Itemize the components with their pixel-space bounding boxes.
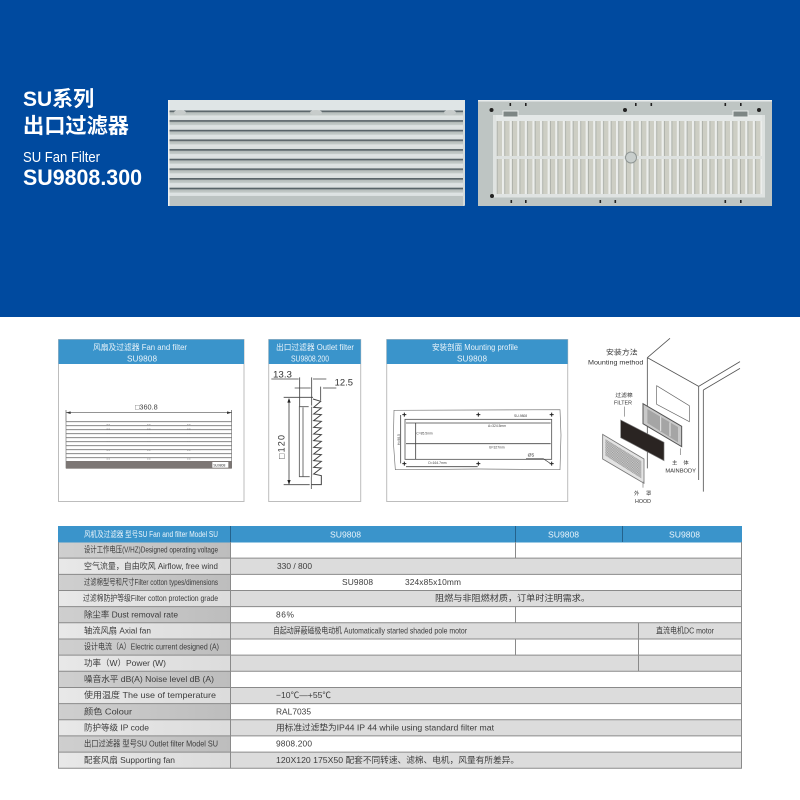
diagram: mounting method bbox=[588, 338, 740, 505]
panel: mounting profile bbox=[387, 340, 568, 502]
title: product name: 出口过滤器 bbox=[23, 115, 129, 138]
table values: 9808.200 bbox=[276, 738, 312, 748]
drawing: outlet filter section: □120 bbox=[277, 435, 287, 459]
heading: mounting method: 安装方法 bbox=[606, 347, 638, 356]
table row labels: 过滤棉型号和尺寸Filter cotton types/dimensions bbox=[84, 577, 218, 587]
table row labels bbox=[83, 544, 219, 765]
panel header: mounting profile bbox=[387, 340, 568, 364]
table row labels: 配套风扇 Supporting fan bbox=[84, 755, 175, 765]
table values bbox=[273, 561, 714, 765]
table row labels: 除尘率 Dust removal rate bbox=[84, 610, 178, 620]
panel header: outlet filter bbox=[269, 340, 361, 364]
table values: 用标准过滤垫为IP44 IP 44 while using standard filter mat bbox=[276, 722, 495, 732]
table header row: 风机及过滤器 型号SU Fan and filter Model SU bbox=[84, 529, 218, 539]
filter mat bbox=[621, 420, 664, 461]
drawing: mounting cut-out: H=98.5 bbox=[397, 434, 401, 445]
drawing: outlet filter section: 12.5 bbox=[335, 378, 353, 388]
table header row: SU9808 bbox=[330, 530, 361, 540]
table row labels: 颜色 Colour bbox=[84, 706, 132, 716]
table values: 330 / 800 bbox=[277, 561, 312, 571]
cabinet outline bbox=[647, 338, 740, 492]
table row labels: 轴流风扇 Axial fan bbox=[84, 626, 151, 636]
table row labels: 噪音水平 dB(A) Noise level dB (A) bbox=[84, 674, 214, 684]
table row labels: 空气流量，自由吹风 Airflow, free wind bbox=[84, 561, 218, 571]
table row labels: 设计电流（A）Electric current designed (A) bbox=[84, 642, 219, 652]
table row labels: 设计工作电压(V/HZ)Designed operating voltage bbox=[84, 544, 218, 554]
table row labels: 出口过滤器 型号SU Outlet filter Model SU bbox=[84, 738, 218, 748]
drawing: mounting cut-out: C=85.5mm bbox=[416, 431, 433, 435]
drawing: filter front dimensions: SU9808 bbox=[213, 463, 226, 467]
table values: 直流电机DC motor bbox=[656, 626, 714, 636]
drawing: mounting cut-out: D=164.7mm bbox=[428, 461, 447, 465]
drawing: mounting cut-out: Ø5 bbox=[528, 452, 535, 458]
model number: SU9808.300 bbox=[23, 165, 142, 190]
labels: parts: FILTER bbox=[614, 400, 632, 406]
banner title block bbox=[23, 88, 142, 190]
panel header: fan and filter: SU9808 bbox=[127, 354, 157, 364]
drawing: mounting cut-out: A=324.5mm bbox=[488, 424, 506, 428]
drawing: mounting cut-out: B=327mm bbox=[489, 446, 505, 450]
table values: 自起动屏蔽磁极电动机 Automatically started shaded pole motor bbox=[273, 626, 467, 636]
drawing: mounting cut-out bbox=[393, 410, 561, 470]
panel header: mounting profile: SU9808 bbox=[457, 354, 487, 364]
table values: −10℃—+55℃ bbox=[276, 690, 332, 700]
blue banner background bbox=[0, 0, 800, 317]
heading: mounting method bbox=[588, 347, 644, 366]
title: series name: SU系列 bbox=[23, 88, 94, 111]
panel: fan and filter bbox=[58, 340, 244, 502]
table values: 120X120 175X50 配套不同转速、滤棉、电机，风量有所差异。 bbox=[276, 755, 519, 765]
table grid lines bbox=[58, 542, 742, 768]
specification table bbox=[58, 526, 742, 768]
table row fills bbox=[58, 542, 742, 768]
table row labels: 使用温度 The use of temperature bbox=[84, 690, 216, 700]
labels: parts: 过滤棉 bbox=[615, 391, 633, 399]
main body bbox=[643, 404, 682, 447]
heading: mounting method: Mounting method bbox=[588, 359, 644, 366]
hood bbox=[603, 434, 644, 483]
table header row: SU9808 bbox=[669, 530, 700, 540]
panel header: outlet filter: SU9808.200 bbox=[291, 354, 329, 364]
panel header: outlet filter: 出口过滤器 Outlet filter bbox=[276, 342, 354, 352]
drawing: outlet filter section bbox=[271, 369, 353, 489]
panel header: mounting profile: 安装剖面 Mounting profile bbox=[432, 342, 518, 352]
labels: parts: 外 罩 bbox=[634, 489, 652, 497]
cut-out outline bbox=[657, 386, 689, 422]
labels: parts: 主 体 bbox=[672, 458, 689, 466]
table values: RAL7035 bbox=[276, 706, 311, 716]
drawing: outlet filter section: 13.3 bbox=[273, 369, 292, 379]
drawing: filter front dimensions bbox=[66, 403, 232, 469]
product photo: filter front louvers bbox=[168, 100, 465, 206]
table values: 86% bbox=[276, 610, 295, 620]
panel header: fan and filter: 风扇及过滤器 Fan and filter bbox=[93, 342, 187, 352]
panel header: fan and filter bbox=[58, 340, 244, 364]
table values: 324x85x10mm bbox=[405, 577, 461, 587]
product photo: filter rear grille bbox=[478, 100, 772, 206]
subtitle: english name: SU Fan Filter bbox=[23, 149, 100, 166]
table row labels: 功率（W）Power (W) bbox=[84, 658, 166, 668]
table row labels: 防护等级 IP code bbox=[84, 722, 149, 732]
table values: 阻燃与非阻燃材质，订单时注明需求。 bbox=[435, 593, 590, 603]
table values: SU9808 bbox=[342, 577, 373, 587]
table row labels: 过滤棉防护等级Filter cotton protection grade bbox=[83, 593, 218, 603]
drawing: mounting cut-out: SU-9808 bbox=[514, 414, 527, 418]
labels: parts: HOOD bbox=[635, 499, 651, 505]
table header row: SU9808 bbox=[548, 530, 579, 540]
panel: outlet filter bbox=[269, 340, 361, 502]
drawing: filter front dimensions: □360.8 bbox=[135, 403, 158, 412]
labels: parts bbox=[614, 391, 696, 505]
labels: parts: MAINBODY bbox=[665, 468, 696, 474]
table header row bbox=[58, 526, 742, 542]
